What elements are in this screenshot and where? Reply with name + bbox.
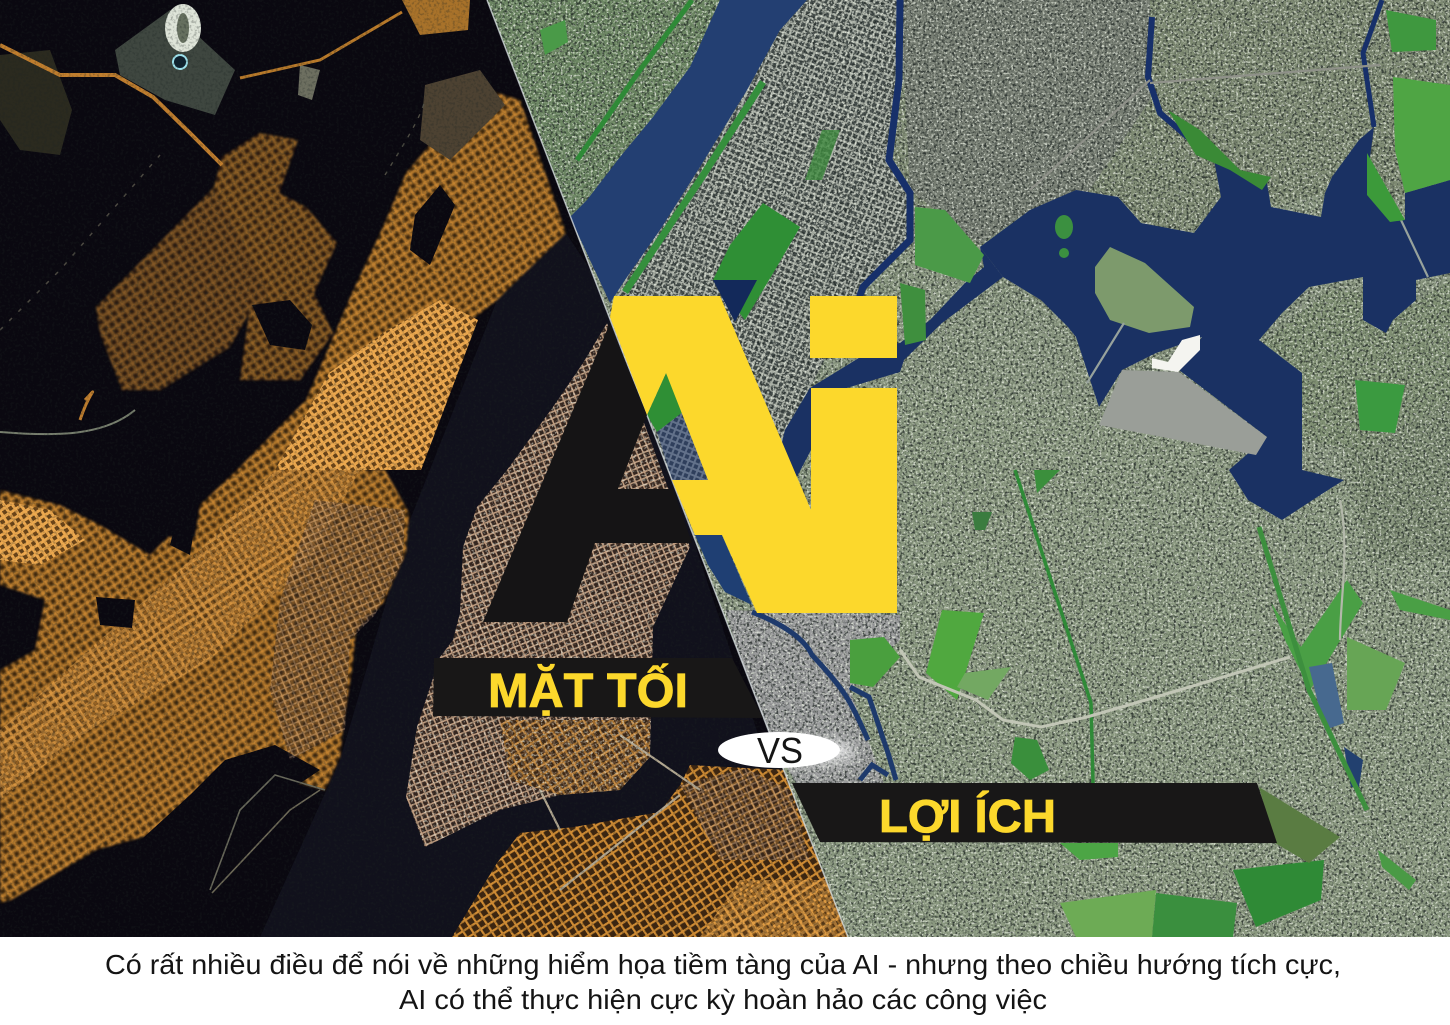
Rikers island	[1095, 247, 1194, 333]
badge label: VS: VS	[757, 730, 803, 771]
logo: AI letters	[483, 296, 897, 622]
upper thin creeks	[1148, 17, 1214, 160]
green banks	[577, 0, 692, 160]
caption text: AI có thể thực hiện cực kỳ hoàn hảo các công việc	[399, 984, 1047, 1015]
dark gaps in the city	[252, 300, 312, 350]
city roads	[0, 45, 222, 165]
banner label: Lợi ích: LỢI ÍCH	[879, 790, 1056, 842]
green corridor	[1015, 470, 1093, 783]
lower city lights	[0, 470, 409, 903]
bright midtown core	[275, 300, 478, 470]
banner label: Mặt tối: MẶT TỐI	[488, 663, 688, 718]
west bank land	[487, 0, 720, 217]
water south of logo	[695, 535, 752, 605]
outline of docks	[212, 790, 320, 893]
park and grid visible inside the logo counter	[647, 373, 683, 432]
Central Park-style green	[713, 203, 800, 320]
bay	[980, 127, 1450, 520]
pale built-up area near divider	[725, 610, 900, 800]
green parks	[1168, 110, 1271, 190]
caption text	[105, 949, 1341, 1015]
letter i dot (yellow)	[810, 296, 897, 358]
lakes	[1309, 663, 1344, 730]
LaGuardia airport	[1099, 370, 1267, 455]
Queens suburbs	[760, 390, 1450, 937]
water: Hudson river	[570, 0, 807, 303]
highways	[900, 650, 1290, 727]
upper Manhattan lights	[237, 87, 566, 470]
panel: night city photo (dark side)	[0, 0, 860, 937]
bridges	[1087, 220, 1428, 383]
letter A and I joined (yellow)	[610, 296, 897, 613]
versus badge	[718, 730, 857, 771]
stadium and upper left scattered lights	[115, 10, 235, 115]
banner: benefits	[792, 783, 1277, 843]
river	[260, 234, 770, 937]
panel: daytime satellite photo (benefit side)	[480, 0, 1450, 937]
East river channel	[775, 247, 1003, 490]
banner: dark side	[433, 658, 763, 718]
Brooklyn lights	[452, 765, 848, 937]
pale quarter of lower city	[270, 500, 405, 760]
caption text: Có rất nhiều điều để nói về những hiểm họa tiềm tàng của AI - nhưng theo chiều hướng tích cực,	[105, 949, 1341, 980]
upper Manhattan urban blocks	[610, 0, 910, 540]
letter A (black)	[483, 323, 692, 622]
lower Manhattan lights	[406, 323, 690, 847]
diagonal divider line	[487, 0, 848, 937]
Harlem river	[855, 0, 910, 310]
bridges	[540, 735, 700, 890]
central Jersey lights	[214, 133, 337, 380]
Bronx and northern blocks	[890, 0, 1450, 247]
